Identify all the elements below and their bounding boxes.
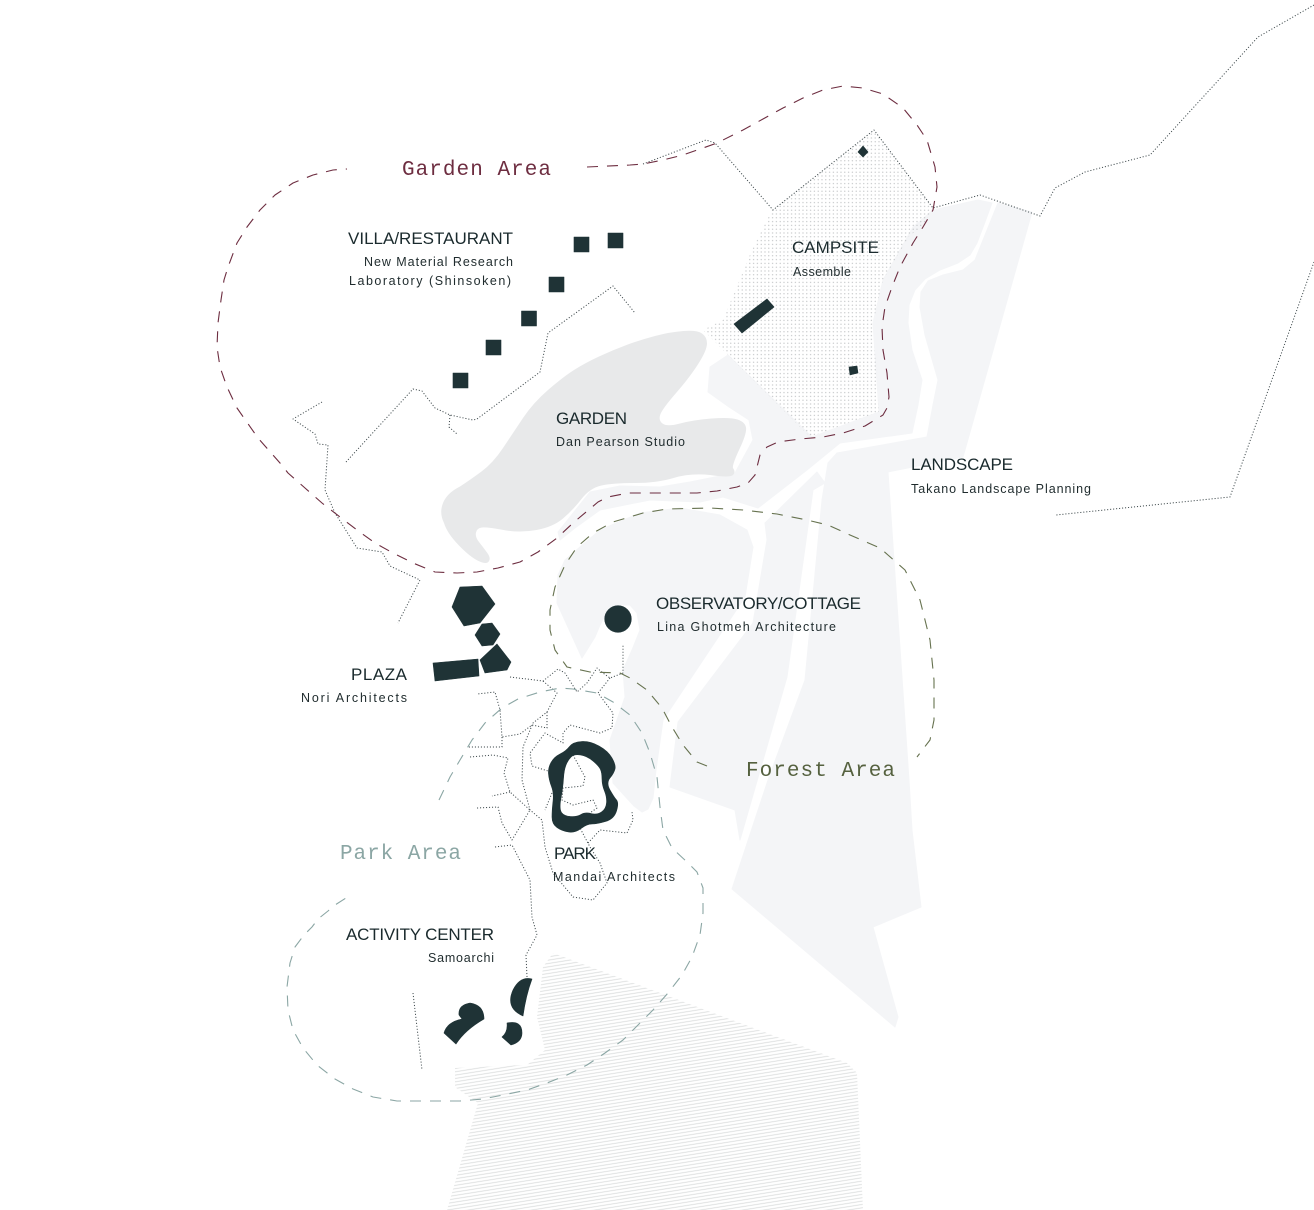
- label: villa/restaurant: VILLA/RESTAURANT: [348, 229, 513, 248]
- label: activity center: [346, 925, 494, 965]
- label: campsite: Assemble: [793, 265, 851, 279]
- label: garden: [556, 409, 685, 449]
- label: park: PARK: [554, 844, 597, 863]
- label: park: Mandai Architects: [553, 870, 675, 884]
- villa buildings: [453, 233, 623, 388]
- label: park: [553, 844, 675, 884]
- activity center buildings: [444, 978, 532, 1045]
- boundary: Garden Area: [217, 86, 937, 573]
- label: plaza: Nori Architects: [301, 691, 407, 705]
- central landscape: [670, 472, 825, 840]
- label: villa/restaurant: New Material Research: [364, 255, 513, 269]
- label: observatory/cottage: Lina Ghotmeh Architecture: [657, 620, 836, 634]
- park building ring: [548, 741, 618, 832]
- label: garden: GARDEN: [556, 409, 627, 428]
- label: landscape: [911, 455, 1091, 496]
- label: activity center: ACTIVITY CENTER: [346, 925, 494, 944]
- garden shape: [441, 331, 746, 563]
- landscape ground areas: [557, 200, 1032, 1027]
- label: activity center: Samoarchi: [428, 951, 494, 965]
- campsite stipple: [703, 130, 933, 437]
- label: observatory/cottage: OBSERVATORY/COTTAGE: [656, 594, 861, 613]
- observatory building: [605, 606, 631, 632]
- area label: forest: Forest Area: [746, 760, 895, 783]
- plaza buildings: [433, 586, 511, 681]
- forest blob: [557, 508, 753, 812]
- label: landscape: Takano Landscape Planning: [911, 482, 1091, 496]
- dotted paths: [293, 5, 1314, 1070]
- campsite buildings: [734, 146, 868, 375]
- label: campsite: [792, 238, 879, 279]
- boundary: Forest Area: [550, 508, 934, 766]
- area label: park: Park Area: [340, 843, 461, 866]
- area label: garden: Garden Area: [402, 159, 551, 182]
- forest hatch: [447, 953, 863, 1210]
- label: observatory/cottage: [656, 594, 861, 634]
- label: campsite: CAMPSITE: [792, 238, 879, 257]
- label: plaza: PLAZA: [351, 665, 408, 684]
- label: landscape: LANDSCAPE: [911, 455, 1013, 474]
- label: villa/restaurant: Laboratory (Shinsoken): [349, 274, 511, 288]
- ground strip beside campsite: [558, 200, 992, 540]
- boundary: Park Area: [287, 688, 703, 1101]
- label: garden: Dan Pearson Studio: [556, 435, 685, 449]
- label: villa/restaurant: [348, 229, 513, 288]
- label: plaza: [301, 665, 408, 705]
- eastern landscape: [732, 203, 1032, 1027]
